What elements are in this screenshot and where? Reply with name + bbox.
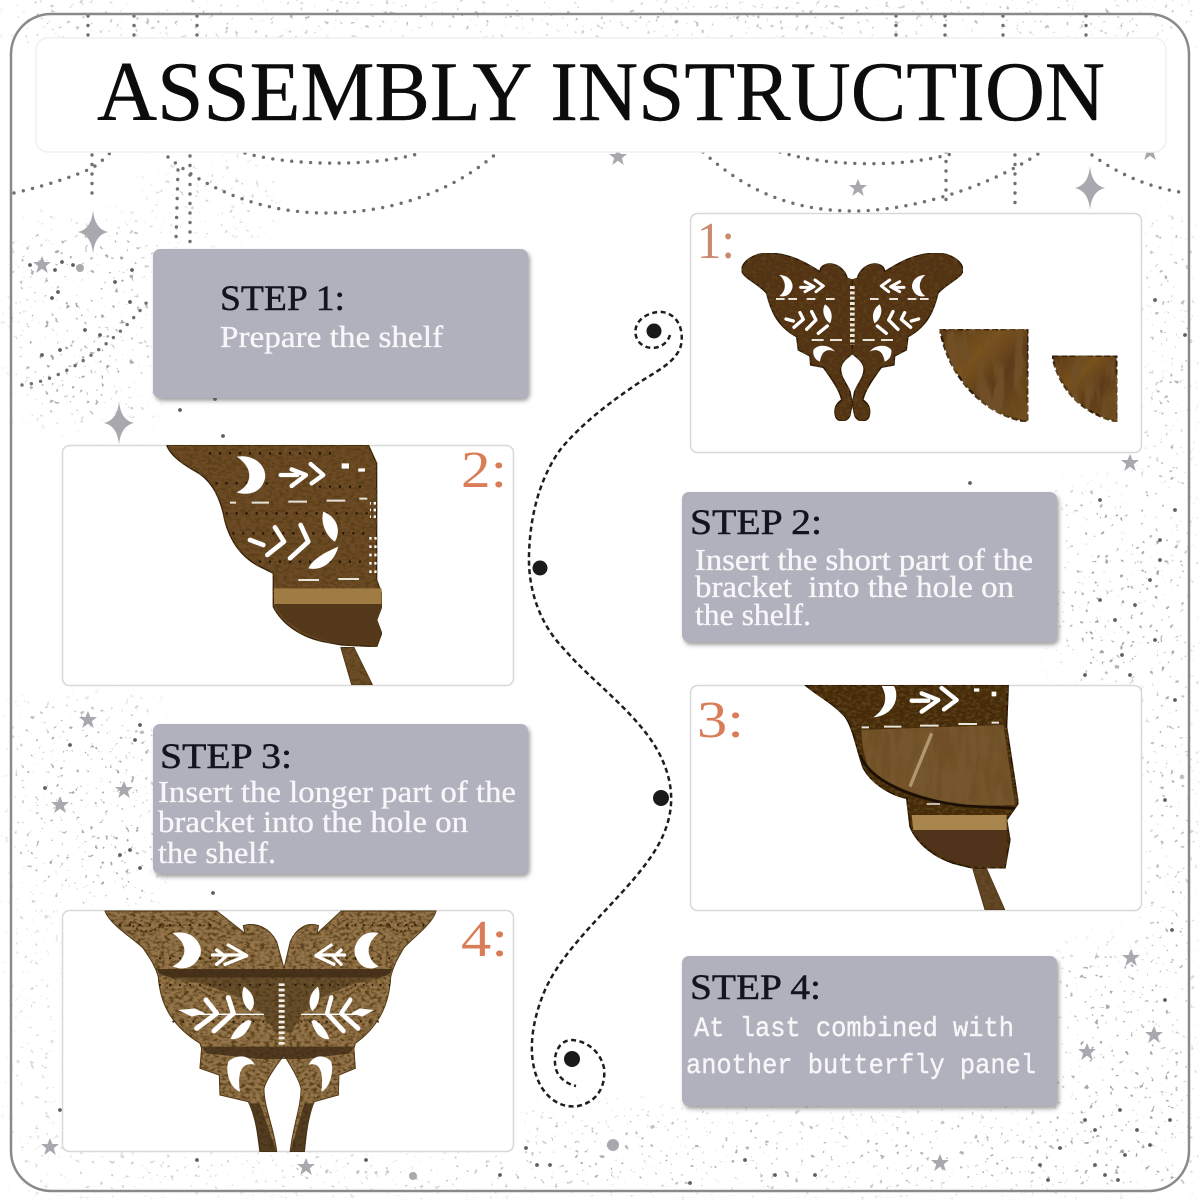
step 1 description: Prepare the shelf [220, 319, 444, 354]
step 4 description: another butterfly panel [686, 1051, 1036, 1082]
large corner shelf [940, 329, 1028, 422]
step 4 description [686, 1014, 1036, 1082]
step 1 heading: STEP 1: [220, 278, 345, 318]
step box 4 [682, 956, 1057, 1106]
small corner shelf [1052, 356, 1117, 422]
step 3 description: bracket into the hole on [158, 804, 469, 839]
number label 3: 3: [697, 692, 744, 749]
step 2 description: Insert the short part of the [695, 542, 1033, 577]
scattered star dots [30, 262, 1185, 1183]
step 4 description: At last combined with [694, 1014, 1014, 1045]
step 2 heading: STEP 2: [690, 502, 822, 542]
step 3 description: the shelf. [158, 835, 276, 870]
step box 2 [682, 492, 1057, 642]
connector node lower middle [653, 790, 669, 806]
step box 1 [153, 249, 528, 398]
step 2 description [695, 542, 1033, 632]
step 4 heading: STEP 4: [690, 967, 821, 1007]
title: ASSEMBLY INSTRUCTION [97, 45, 1105, 139]
step 3 description: Insert the longer part of the [158, 774, 516, 809]
assembled moth shelf [105, 911, 436, 1152]
panel: photo 4, finished shelf [62, 910, 514, 1152]
moth shelf back panel [742, 253, 963, 421]
dotted star garlands [14, 16, 1186, 385]
half moth with both shelves [805, 685, 1018, 910]
connector node bottom [564, 1051, 580, 1067]
connector node top [646, 324, 662, 338]
dashed connector path [529, 312, 682, 1106]
panel: photo 2, short bracket inserted [62, 442, 514, 686]
number label 4: 4: [461, 911, 508, 968]
step 3 heading: STEP 3: [160, 736, 292, 776]
step box 3 [153, 724, 528, 874]
step 2 description: the shelf. [695, 597, 811, 632]
connector node upper middle [532, 560, 548, 576]
title panel [36, 38, 1166, 152]
step 3 description [158, 774, 516, 870]
number label 2: 2: [461, 442, 507, 499]
number label 1: 1: [697, 213, 735, 270]
panel: photo 3, long bracket inserted [690, 685, 1142, 910]
panel: photo 1, unassembled parts [690, 213, 1142, 452]
half moth with bracket [167, 445, 382, 685]
step 2 description: bracket into the hole on [695, 569, 1015, 604]
